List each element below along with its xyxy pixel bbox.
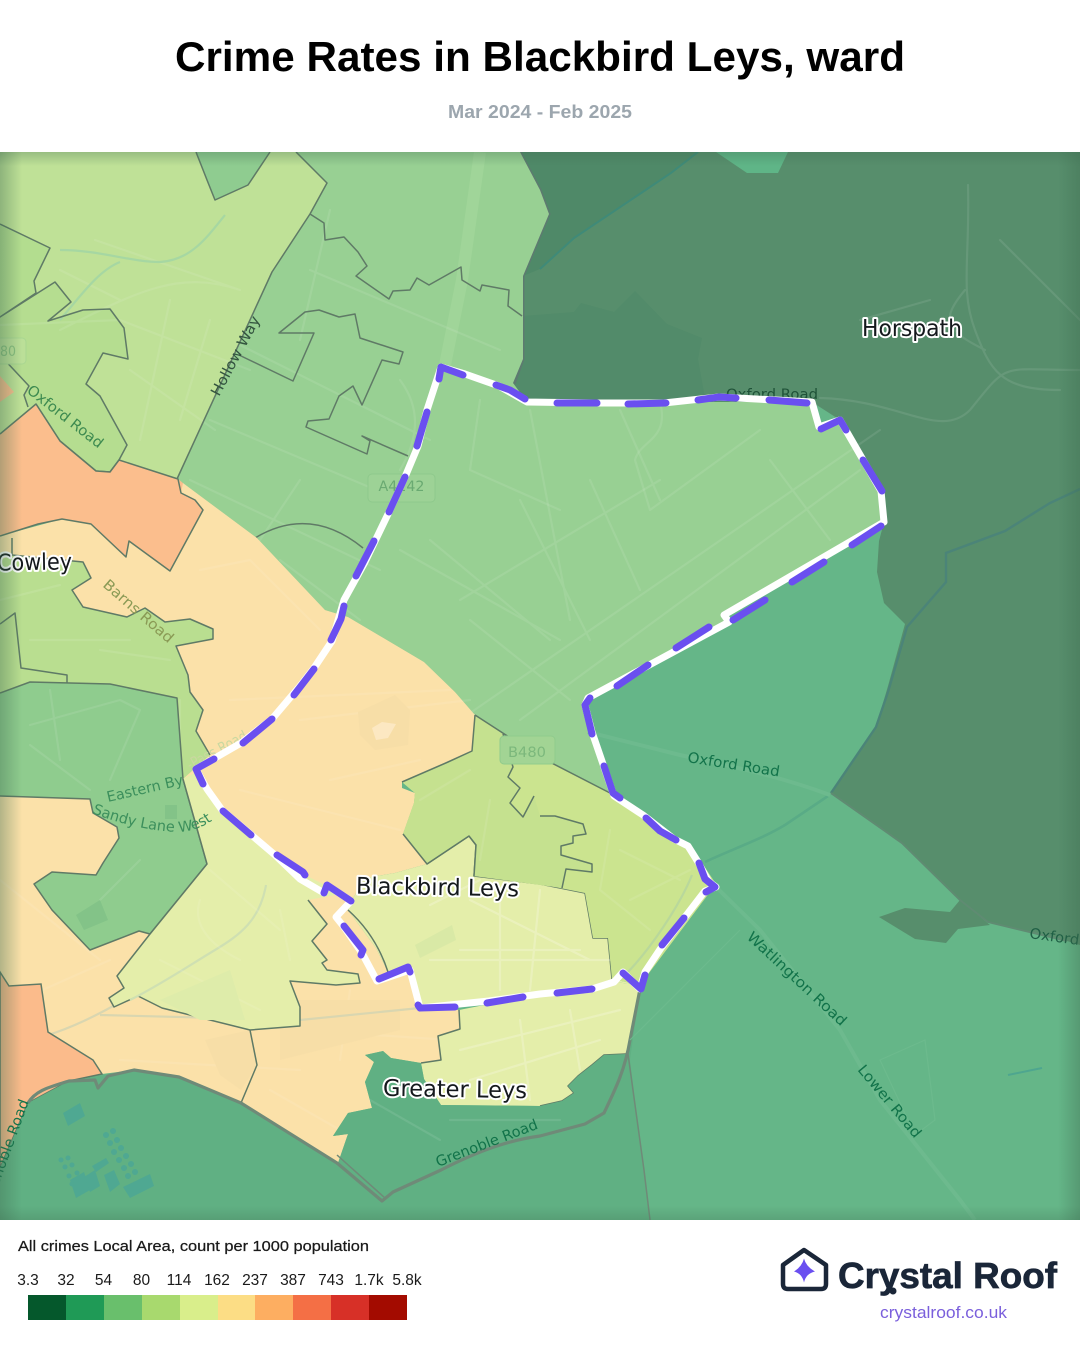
road shield: 480 clipped: 80 (0, 344, 16, 360)
region: ward and northern light green (177, 152, 884, 796)
region: north-west lime (0, 152, 327, 479)
region: pale yellow south (421, 982, 640, 1106)
lines and roads in the eastern green area (588, 732, 1042, 1220)
region: lime east of centre (402, 715, 716, 985)
legend values: 387 (280, 1272, 306, 1289)
road shield: 480 clipped (0, 338, 26, 364)
place labels: Blackbird Leys (356, 874, 519, 902)
road labels: Oxford Road (686, 750, 781, 780)
website: crystalroof.co.uk (880, 1304, 1008, 1322)
legend values: 32 (57, 1272, 75, 1289)
region: south green Greater Leys and bottom-left (0, 989, 650, 1220)
place labels: Greater Leys (383, 1076, 527, 1104)
region: orange south-west (0, 972, 102, 1168)
road labels (0, 313, 1080, 1204)
road labels: Watlington Road (743, 929, 849, 1030)
road labels: Barns Road (99, 577, 176, 647)
road labels: Eastern By (105, 773, 185, 806)
place labels (0, 316, 962, 1104)
legend values: 54 (95, 1272, 112, 1289)
title: Crime Rates in Blackbird Leys, ward (175, 33, 905, 80)
icon: house with star (783, 1250, 826, 1289)
ward boundary: white underlay (196, 367, 884, 1008)
region: dark green Horspath (513, 152, 1080, 945)
ward boundary: purple dashes (196, 367, 882, 1008)
legend values: 743 (318, 1272, 344, 1289)
brand name: Crystal Roof (838, 1255, 1058, 1296)
legend values: 162 (204, 1272, 230, 1289)
region: green eastern by-pass (0, 682, 207, 950)
region: pale yellow west (109, 770, 360, 1030)
legend values: 114 (167, 1272, 192, 1289)
Crystal Roof logo (783, 1250, 1058, 1322)
logo key dot on the y tail (890, 1288, 896, 1294)
legend values: 1.7k (354, 1272, 384, 1289)
place labels: Horspath (862, 316, 962, 342)
road shield: A4142 (368, 474, 435, 502)
subtitle: date range: Mar 2024 - Feb 2025 (448, 102, 632, 122)
legend values: 5.8k (392, 1272, 422, 1289)
road labels: Hollow Way (208, 313, 264, 399)
legend values: 3.3 (17, 1272, 39, 1289)
legend values: 80 (133, 1272, 150, 1289)
road labels: Oxford Road (24, 383, 106, 452)
region: orange higher crime north-west (0, 404, 203, 571)
road shield: B480: B480 (508, 745, 546, 761)
legend (17, 1238, 422, 1320)
road labels: -Pass Road (184, 728, 250, 774)
road shield: A4142: A4142 (378, 479, 424, 495)
road labels: Grenoble Road (434, 1117, 540, 1171)
road shield: B480 (500, 736, 555, 764)
region: lime west of centre (0, 538, 213, 779)
choropleth map (0, 152, 1080, 1220)
road labels: Oxford Road (726, 387, 818, 403)
legend values (17, 1272, 422, 1289)
road labels: Sandy Lane West (93, 804, 212, 832)
region: beige central and south-west (0, 483, 475, 1163)
map base: medium-low crime area (0, 152, 1080, 1220)
map edge vignette (0, 152, 1080, 1220)
treatment works features (58, 1103, 154, 1198)
region: pale yellow Blackbird Leys (348, 836, 640, 1008)
road labels: Lower Road (854, 1062, 924, 1142)
legend values: 237 (242, 1272, 268, 1289)
legend title: All crimes Local Area, count per 1000 population (18, 1238, 369, 1255)
legend colour scale (28, 1295, 407, 1320)
